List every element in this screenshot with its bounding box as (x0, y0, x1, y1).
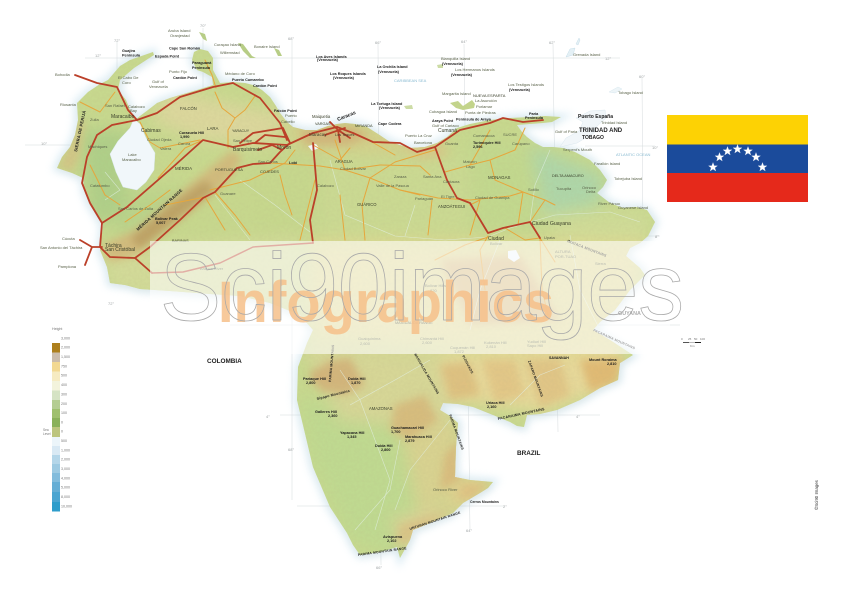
legend values: 4,000 (61, 476, 70, 480)
southern labels: 2,360 (328, 414, 338, 418)
legend values (61, 336, 72, 508)
southern labels: 2,160 (487, 405, 497, 409)
southern labels: MAIGUALIDA MOUNTAINS (413, 352, 440, 395)
southern labels: Cuquenán Hill (450, 345, 475, 350)
north-central labels: VARGAS (315, 122, 331, 126)
legend colour bar (52, 343, 60, 512)
northwest labels: Bay (130, 108, 137, 113)
northwest labels: Falcón Point (274, 109, 298, 113)
northwest labels: MÉRIDA (175, 166, 192, 171)
north-central labels: (Venezuela) (378, 70, 400, 74)
graticule values: 2° (503, 504, 507, 509)
north-central labels: La Orchila Island (377, 65, 408, 69)
northeast labels: Sotillo (528, 187, 540, 192)
north-central labels: GUÁRICO (357, 202, 377, 207)
graticule values: 70° (200, 23, 206, 28)
northwest labels: FALCÓN (180, 106, 197, 111)
graticule values: 66° (376, 565, 382, 570)
northwest labels: Valera (160, 146, 172, 151)
northeast labels: Farallón Island (594, 161, 620, 166)
southern labels: 2,600 (360, 341, 371, 346)
northeast labels: Delta (586, 189, 596, 194)
southern labels: Uriaca Hill (486, 401, 505, 405)
north-central labels: Blanquilla Island (441, 56, 470, 61)
island: Bonaire (274, 48, 282, 56)
northeast labels: ANZOÁTEGUI (438, 204, 465, 209)
north-central labels: Calabozo (317, 183, 335, 188)
northwest labels: YARACUY (232, 129, 250, 133)
scale bar: 0 (681, 337, 683, 341)
southern labels: UNTURAN MOUNTAIN RANGE (409, 511, 462, 531)
northeast labels: Araya Point (432, 119, 454, 123)
legend title: Height (52, 327, 62, 331)
north-central labels: Valle de la Pascua (376, 183, 410, 188)
northwest labels: MÉRIDA MOUNTAIN RANGE (135, 188, 183, 232)
island: Curacao (238, 43, 256, 58)
legend values: 0 (61, 420, 63, 424)
northeast labels: Serpent's Mouth (563, 147, 592, 152)
northeast labels: Tucupita (556, 186, 572, 191)
lake and inland waters (105, 120, 640, 530)
southern labels: Mount Roraima (589, 358, 618, 362)
northeast labels: Ciudad de Guanipa (475, 195, 510, 200)
northwest labels: Venezuela (149, 84, 168, 89)
northeast labels: Orinoco (582, 185, 597, 190)
northwest labels: San Antonio del Táchira (40, 245, 83, 250)
northwest labels: Barquisimeto (233, 147, 262, 153)
northwest labels: Arauca River (200, 266, 224, 271)
northeast labels: Guanta (445, 141, 459, 146)
island: Trinidad (560, 110, 606, 147)
northwest labels: Maracaibo (122, 157, 141, 162)
north-central labels: ARAGUA (335, 159, 353, 164)
northwest labels: Riosanta (60, 102, 77, 107)
northwest labels: Cape San Román (169, 46, 201, 50)
scale bar: 50 (694, 337, 698, 341)
north-central labels: La Asunción (475, 98, 497, 103)
island: Margarita (450, 100, 475, 110)
northeast labels: Barcelona (414, 140, 433, 145)
southern labels: Kukenán Hill (484, 340, 507, 345)
northeast labels: ALTURA (555, 249, 571, 254)
scale bar (681, 337, 705, 348)
legend values: 8,000 (61, 495, 70, 499)
graticule values: 68° (288, 36, 294, 41)
north-central labels: MIRANDA (355, 124, 373, 128)
northwest labels: Peninsula (122, 54, 141, 58)
legend values: 2,000 (61, 458, 70, 462)
country labels: COLOMBIA (207, 358, 242, 365)
place labels (40, 23, 659, 570)
stars (708, 144, 767, 171)
northwest labels: San Carlos (258, 159, 278, 164)
northwest labels: Willemstad (220, 50, 240, 55)
northwest labels: Guajira (122, 49, 136, 53)
northwest labels: LARA (207, 126, 219, 131)
legend values: 300 (61, 392, 67, 396)
Lake Valencia (308, 144, 319, 151)
southern labels: 1,870 (351, 381, 361, 385)
northwest labels: Táchira (105, 243, 122, 249)
northeast labels: Puerto España (578, 114, 613, 120)
northwest labels (40, 28, 298, 271)
northeast labels: Ciudad Guayana (532, 221, 571, 227)
northwest labels: Cúcuta (62, 236, 75, 241)
northwest labels: Bohodia (55, 72, 70, 77)
graticule values: 72° (114, 38, 120, 43)
flag of Venezuela (667, 115, 808, 202)
northwest labels: COJEDES (260, 169, 279, 174)
southern labels: PARIMA MOUNTAINS (328, 344, 335, 382)
mountain ranges (58, 120, 622, 545)
northwest labels: Peninsula (192, 66, 211, 70)
southern labels (303, 261, 636, 557)
southern labels: 2,879 (405, 439, 415, 443)
southern labels: 1,345 (347, 435, 357, 439)
northeast labels: POR-TUAO (555, 254, 576, 259)
southern labels: Duida Hill (375, 444, 393, 448)
island: Grenada (566, 38, 580, 57)
southern labels: 1,872 (454, 349, 465, 354)
southern labels: Sierra (595, 261, 606, 266)
southern labels: Sipapo Mountains (316, 389, 350, 401)
northwest labels: Puerto Cumarebo (232, 78, 265, 82)
terrain texture (50, 40, 670, 570)
legend values: 10,000 (61, 504, 72, 508)
coastal water glow (57, 49, 656, 560)
northeast labels: Maturín (463, 159, 477, 164)
graticule values: 12° (95, 53, 101, 58)
north-central labels: Caracas (337, 110, 357, 123)
island: Tobago (609, 87, 622, 93)
graticule values (41, 23, 659, 570)
north-central labels: CARIBBEAN SEA (394, 78, 427, 83)
southern labels: 2,800 (306, 381, 316, 385)
northwest labels: Coro (122, 80, 131, 85)
graticule values: 66° (375, 40, 381, 45)
northeast labels: IMATACA MOUNTAINS (567, 239, 607, 258)
northwest labels: Pamplona (58, 264, 77, 269)
southern labels: Guachamacari Hill (391, 426, 424, 430)
northeast labels: 2,596 (473, 145, 483, 149)
north-central labels: (Venezuela) (379, 106, 401, 110)
northeast labels: Cumaná (438, 128, 457, 134)
northeast labels: Peninsula (525, 116, 544, 120)
northeast labels: Tobejuba Island (614, 176, 642, 181)
northeast labels: Gulf of Cariaco (432, 123, 459, 128)
north-central labels: Punta de Piedras (465, 110, 496, 115)
northeast labels (405, 52, 650, 259)
graticule values: 62° (549, 40, 555, 45)
graticule lines and labels (25, 28, 680, 565)
northeast labels: El Tigre (441, 194, 455, 199)
northeast labels: Pariaguán (415, 196, 433, 201)
northeast labels: SUCRE (503, 132, 517, 137)
northeast labels: DELTA AMACURO (552, 174, 584, 178)
legend values: 2,000 (61, 346, 70, 350)
northeast labels: Cantaura (443, 179, 460, 184)
northwest labels: Guanare (220, 191, 236, 196)
north-central labels: Los Hermanos Islands (455, 67, 495, 72)
northwest labels: Maracaibo (111, 114, 135, 120)
country labels: GUYANA (618, 311, 641, 317)
northwest labels: Carora (178, 141, 191, 146)
legend: height scale (43, 327, 72, 512)
northwest labels: Paraguaná (192, 61, 212, 65)
island: La Blanquilla (437, 64, 443, 68)
north-central labels: Zaraza (394, 174, 407, 179)
southern labels: 820 (430, 288, 437, 293)
southern labels: Duida Hill (348, 377, 366, 381)
island: La Tortuga (404, 105, 413, 109)
northwest labels: Catatumbo (90, 183, 110, 188)
graticule values: 8° (655, 234, 659, 239)
legend values: 0 (61, 430, 63, 434)
southern labels: ZAPARO MOUNTAINS (527, 360, 544, 398)
watermark: Infographics: Infographics (218, 270, 554, 335)
sea level label: Level (43, 432, 51, 436)
legend values: 1,500 (61, 355, 70, 359)
southern labels: Chimantá Hill (420, 336, 444, 341)
northwest labels: San Carlos de Zulia (118, 206, 154, 211)
northwest labels: Oranjestad (170, 33, 190, 38)
southern labels: PARIMA MOUNTAINS (448, 414, 465, 451)
north-central labels: Cape Codera (378, 122, 402, 126)
north-central labels: Maracay (309, 132, 327, 137)
southern labels: SAVANNAH (549, 356, 569, 360)
northwest labels: Aruba Island (168, 28, 190, 33)
northeast labels: Puerto La Cruz (405, 133, 432, 138)
southern labels: Yudiuri Hill (527, 339, 546, 344)
northwest labels: Curaçao Island (214, 42, 241, 47)
north-central labels: La Tortuga Island (371, 102, 403, 106)
pale watermark band (150, 241, 670, 354)
southern labels: Orinoco River (433, 487, 458, 492)
northeast labels: TRINIDAD AND (579, 128, 623, 134)
main highways (75, 75, 543, 273)
graticule values: 10° (41, 141, 47, 146)
northeast labels: Gulf of Paria (555, 129, 578, 134)
legend values: 100 (61, 411, 67, 415)
southern labels: PARIMA MOUNTAIN RANGE (358, 546, 408, 557)
sea level label: Sea (43, 428, 49, 432)
north-central labels: Cubagua Island (429, 109, 457, 114)
northwest labels: Cardón Point (253, 84, 278, 88)
northeast labels: Paria (529, 112, 539, 116)
northwest labels: Médano de Coro (225, 71, 256, 76)
southern labels: PACARAIMA MOUNTAINS (497, 407, 545, 421)
northwest labels: Morón (277, 145, 291, 151)
southern labels: 2,600 (422, 340, 433, 345)
southern labels: PACARAIMA MOUNTAINS (593, 328, 636, 351)
northwest labels: Cabello (281, 119, 295, 124)
northwest labels: Machiques (88, 144, 107, 149)
southern labels: Avispuena (383, 535, 403, 539)
island: Aruba (199, 32, 207, 41)
southern labels: Galleres Hill (315, 410, 337, 414)
northeast labels: Trinidad Island (601, 120, 627, 125)
north-central labels: Maiquetia (312, 114, 331, 119)
graticule values: 10° (652, 145, 658, 150)
legend values: 750 (61, 364, 67, 368)
graticule values: 64° (466, 528, 472, 533)
northwest labels: Bonaire Island (254, 44, 280, 49)
southern labels: 2,102 (387, 539, 397, 543)
country labels (207, 311, 641, 457)
northeast labels: Tobago Island (618, 90, 643, 95)
northwest labels: Cabimas (141, 128, 161, 134)
road network (75, 60, 555, 315)
northeast labels: Lago (466, 164, 476, 169)
north-central labels: Ciudad Bolivar (340, 166, 367, 171)
southern labels: Cerros Mountains (470, 500, 499, 504)
northwest labels: 1,990 (180, 135, 190, 139)
graticule values: 64° (461, 39, 467, 44)
graticule values: 4° (266, 414, 270, 419)
northeast labels: Santa Ana (423, 174, 442, 179)
southern labels: Marahuaca Hill (405, 435, 432, 439)
graticule values: 68° (288, 447, 294, 452)
northeast labels: MONAGAS (488, 175, 511, 180)
legend values: 500 (61, 439, 67, 443)
northwest labels: Zulia (90, 117, 99, 122)
legend values: 500 (61, 374, 67, 378)
southern labels: 2,800 (381, 448, 391, 452)
terrain base (50, 40, 670, 570)
northeast labels: Carúpano (512, 141, 530, 146)
northwest labels: Lake (128, 152, 137, 157)
northwest labels: Lobi (289, 161, 297, 165)
northwest labels: Gulf of (152, 79, 165, 84)
northwest labels: SIERRA DE PERIJÁ (73, 110, 87, 152)
graticule values: 72° (108, 301, 114, 306)
legend values: 3,000 (61, 336, 70, 340)
northwest labels: San Cristóbal (105, 247, 135, 253)
southern labels: 1,700 (391, 430, 401, 434)
northwest labels: Ciudad Ojeda (147, 137, 172, 142)
north-central labels: (Venezuela) (333, 76, 355, 80)
northeast labels: Cumanacoa (473, 133, 495, 138)
northwest labels: Curazuela Hill (179, 131, 204, 135)
northwest labels: San Felipe (233, 138, 253, 143)
northwest labels: BARINAS (172, 239, 189, 243)
country labels: BRAZIL (517, 450, 541, 457)
northwest labels: Punto Fijo (169, 69, 188, 74)
rivers (105, 150, 640, 530)
graticule values: 60° (639, 74, 645, 79)
north-central labels: Los Roques Islands (330, 72, 366, 76)
north-central labels: (Venezuela) (509, 88, 531, 92)
north-central labels: Porlamar (476, 104, 493, 109)
southern labels: Yapacana Hill (340, 431, 364, 435)
Guri reservoir (508, 250, 520, 262)
northeast labels: Grenada Island (573, 52, 600, 57)
northwest labels: Cardón Point (173, 76, 198, 80)
southern labels: Sapo Hill (527, 343, 543, 348)
north-central labels: Los Testigos Islands (508, 82, 544, 87)
northwest labels: San Rafael (105, 103, 125, 108)
legend values: 200 (61, 402, 67, 406)
southern labels: MAIGUALIDA RANGE (395, 321, 433, 325)
north-central labels: (Venezuela) (317, 58, 339, 62)
southern labels: Pariaque Hill (303, 377, 326, 381)
panel: terrain map of Venezuela (50, 40, 670, 570)
secondary roads (80, 60, 555, 315)
northeast labels: Guyanese Island (618, 205, 648, 210)
northeast labels: Bolívar (490, 241, 503, 246)
north-central labels: Margarita Island (442, 91, 471, 96)
southern labels: Bolívar Hills (425, 283, 446, 288)
north-central labels (309, 55, 544, 207)
north-central labels: NUEVA ESPARTA (473, 93, 506, 98)
Lake Maracaibo (110, 120, 155, 190)
southern labels: 2,810 (486, 344, 497, 349)
copyright: ©Sci90 Images (814, 479, 819, 510)
islands (199, 32, 622, 147)
northeast labels: Upata (544, 235, 555, 240)
northeast labels: River Pánuo (598, 201, 621, 206)
scale bar: 25 (688, 337, 692, 341)
legend values: 5,000 (61, 486, 70, 490)
northeast labels: Turimiquire Hill (473, 141, 501, 145)
southern labels: PIJIGUAOS (461, 355, 474, 375)
graticule values: 12° (605, 56, 611, 61)
sea level label (43, 428, 51, 436)
northwest labels: 5,007 (156, 221, 166, 225)
north-central labels: Los Aves Islands (316, 55, 347, 59)
northwest labels: Puerto (285, 113, 298, 118)
legend values: 3,000 (61, 467, 70, 471)
scale bar: 100 (700, 337, 705, 341)
graticule values: 4° (576, 414, 580, 419)
southern labels: AMAZONAS (369, 406, 393, 411)
legend values: 400 (61, 383, 67, 387)
legend values: 1,000 (61, 448, 70, 452)
north-central labels: (Venezuela) (451, 73, 473, 77)
northwest labels: El Cabo De (118, 75, 139, 80)
north-central labels: (Venezuela) (442, 62, 464, 66)
watermark: Sci90images outline: Sci90images (160, 234, 684, 341)
north-central labels: Los Teques (335, 133, 354, 137)
northeast labels: ATLANTIC OCEAN (616, 152, 650, 157)
southern labels: Guaiquinima (358, 336, 381, 341)
northeast labels: Ciudad (488, 236, 504, 242)
terrain colour zones (80, 90, 650, 555)
scale bar: Km (690, 344, 695, 348)
northeast labels: Peninsula de Araya (456, 118, 492, 122)
northwest labels: Espada Point (155, 54, 180, 58)
northwest labels: Calabozo (128, 104, 146, 109)
southern labels: 2,810 (607, 362, 617, 366)
northwest labels: PORTUGUESA (215, 167, 243, 172)
northwest labels: Bolívar Peak (155, 217, 179, 221)
border road through pale zone (152, 243, 313, 273)
northeast labels: TOBAGO (582, 135, 604, 141)
